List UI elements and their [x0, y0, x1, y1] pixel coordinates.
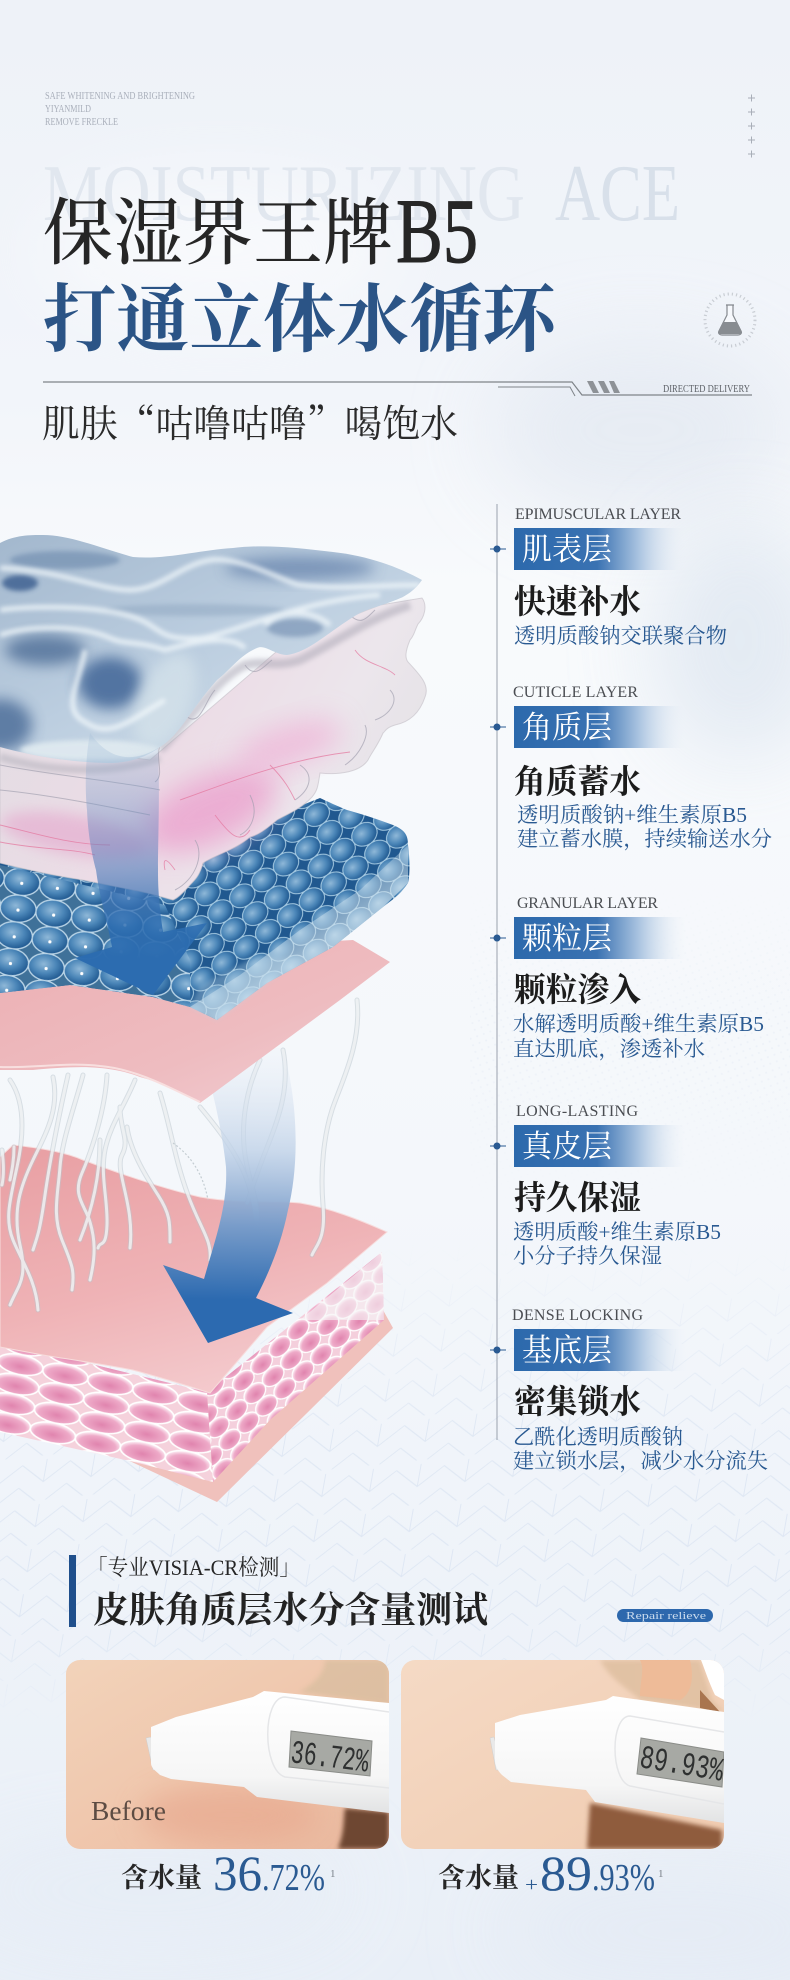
panel: dermis layer: 持久保湿 [514, 1172, 641, 1219]
title line 1: 保湿界王牌 [43, 174, 393, 279]
caption: before value: 36 [213, 1845, 262, 1901]
caption: after value [438, 1845, 664, 1901]
header small English text [45, 91, 195, 128]
header small English text: REMOVE FRECKLE [45, 117, 118, 128]
panel: dermis layer: 真皮层 [522, 1121, 612, 1166]
panel: basal layer: DENSE LOCKING [512, 1307, 643, 1324]
panel: dermis layer: 透明质酸+维生素原B5 [513, 1220, 721, 1244]
photo: after [401, 1660, 726, 1849]
title line 2: 打通立体水循环 [43, 280, 561, 362]
caption: after value: + [525, 1874, 538, 1896]
caption: before value: 含水量 [121, 1856, 202, 1895]
device [146, 1691, 389, 1813]
blue sphere layer [0, 798, 410, 1020]
panel: epidermis layer: 肌表层 [522, 524, 612, 569]
icon: flask seal [705, 294, 755, 346]
panel: granular layer: 直达肌底，渗透补水 [513, 1037, 705, 1062]
watermark title: MOISTURIZING [43, 150, 525, 238]
watermark title: ACE [555, 150, 680, 238]
panel: stratum corneum layer: CUTICLE LAYER [513, 684, 638, 701]
panel: epidermis layer: 透明质酸钠交联聚合物 [514, 624, 727, 648]
translucent membrane layer [0, 598, 426, 900]
panel: basal layer: 基底层 [522, 1325, 612, 1370]
subtitle: 肌肤“咕噜咕噜”喝饱水 [42, 393, 458, 448]
panel: granular layer: GRANULAR LAYER [517, 895, 658, 912]
tag: repair relieve: Repair relieve [626, 1610, 706, 1622]
section heading: VISIA-CR test [69, 1555, 488, 1633]
marker [490, 1347, 506, 1353]
header small English text: YIYANMILD [45, 104, 91, 115]
panel: basal layer: 乙酰化透明质酸钠 [513, 1425, 683, 1449]
panel: basal layer: 建立锁水层，减少水分流失 [513, 1449, 768, 1474]
header small English text: SAFE WHITENING AND BRIGHTENING [45, 91, 195, 102]
panel: granular layer [490, 895, 764, 1062]
dermis sheet lower [0, 1145, 387, 1393]
panel: stratum corneum layer: 角质层 [522, 702, 612, 747]
top skin surface [0, 530, 430, 770]
photo: before [66, 1660, 389, 1849]
timeline axis [496, 504, 498, 1440]
panel: granular layer: 颗粒渗入 [514, 964, 641, 1011]
marker [490, 1143, 506, 1149]
tag: repair relieve [617, 1609, 713, 1622]
section heading: VISIA-CR test: 皮肤角质层水分含量测试 [93, 1582, 488, 1633]
panel: dermis layer: LONG-LASTING [516, 1103, 638, 1120]
caption: after value: 1 [658, 1868, 664, 1880]
caption: before value: 1 [330, 1868, 336, 1880]
marker [490, 935, 506, 941]
panel: epidermis layer: 快速补水 [514, 576, 641, 623]
marker [490, 546, 506, 552]
skin layer illustration [0, 530, 430, 1502]
panel: epidermis layer [490, 506, 727, 648]
panel: dermis layer: 小分子持久保湿 [513, 1244, 662, 1268]
title line 1: B5 [396, 180, 478, 282]
panel: stratum corneum layer: 角质蓄水 [514, 756, 641, 803]
panel: basal layer: 密集锁水 [514, 1376, 641, 1423]
device: 36.72% [289, 1735, 371, 1782]
hair strands [2, 1000, 358, 1310]
panel: granular layer: 颗粒层 [522, 913, 612, 958]
photo: before: Before [91, 1796, 166, 1826]
panel: epidermis layer: EPIMUSCULAR LAYER [515, 506, 681, 523]
panel: dermis layer [490, 1103, 721, 1268]
marker [490, 724, 506, 730]
panel: granular layer: 水解透明质酸+维生素原B5 [513, 1012, 764, 1036]
arrow: lower [163, 1048, 296, 1343]
caption: before value [121, 1845, 336, 1901]
caption: after value: 89 [540, 1845, 592, 1901]
divider with stripes [43, 381, 752, 396]
dermis sheet upper [0, 940, 390, 1103]
panel: stratum corneum layer: 透明质酸钠+维生素原B5 [517, 803, 747, 827]
panel: stratum corneum layer: 建立蓄水膜，持续输送水分 [517, 827, 772, 852]
decorative plus marks [748, 94, 755, 158]
base cell layer [0, 1252, 393, 1502]
device [490, 1696, 726, 1823]
arrow: upper [75, 733, 207, 995]
caption: after value: 含水量 [438, 1856, 519, 1895]
caption: after value: .93% [592, 1857, 655, 1899]
panel: basal layer [490, 1307, 768, 1474]
device: 89.93% [637, 1740, 726, 1791]
divider with stripes: DIRECTED DELIVERY [663, 383, 750, 395]
panel: stratum corneum layer [490, 684, 772, 852]
caption: before value: .72% [262, 1857, 325, 1899]
section heading: VISIA-CR test: 「专业VISIA-CR检测」 [87, 1555, 300, 1580]
